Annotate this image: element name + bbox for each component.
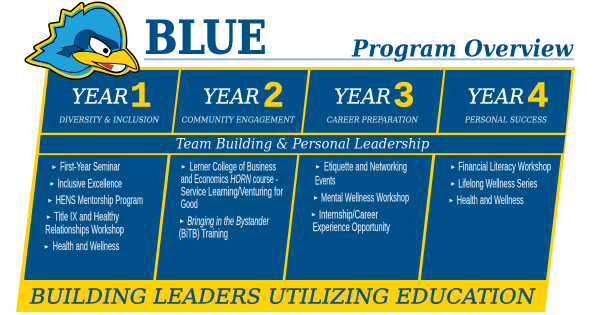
item: lifelong wellness: Lifelong Wellness Series xyxy=(458,178,537,190)
item: financial literacy: Financial Literacy Workshop xyxy=(458,162,551,174)
cheek feathers xyxy=(57,45,84,57)
item: lifelong wellness xyxy=(451,178,537,190)
beak xyxy=(72,50,137,73)
panel: year 4 activities xyxy=(421,155,561,280)
band heading: Team Building & Personal Leadership xyxy=(176,136,429,152)
item: health and wellness: Health and Wellness xyxy=(53,241,119,253)
item: title ix xyxy=(45,212,124,236)
face patch xyxy=(74,30,99,51)
brow xyxy=(85,31,119,50)
theme: community: COMMUNITY ENGAGEMENT xyxy=(182,115,296,125)
title: BLUE: BLUE xyxy=(144,10,266,64)
item: horn course: and Economics HORN course - xyxy=(181,174,278,186)
icon: blue hen mascot xyxy=(27,4,137,77)
heading: year 3: YEAR xyxy=(334,84,391,108)
theme: personal: PERSONAL SUCCESS xyxy=(464,115,547,125)
number: 1: 1 xyxy=(130,77,152,118)
heading: year 1: YEAR xyxy=(72,84,128,108)
item: title ix: Title IX and Healthy xyxy=(54,212,119,224)
item: mental wellness xyxy=(314,193,409,205)
panel: year 3 activities xyxy=(285,155,432,280)
item: etiquette xyxy=(315,161,407,187)
panel: year 3 xyxy=(303,70,444,133)
item: etiquette: Etiquette and Networking xyxy=(324,161,407,173)
item: horn course: Good xyxy=(181,199,198,211)
item: internship: Experience Opportunity xyxy=(313,222,390,234)
item: title ix: Relationships Workshop xyxy=(45,224,124,236)
panel: yellow frame xyxy=(16,67,575,312)
panel: year 2 xyxy=(174,70,308,133)
item: horn course: Service Learning/Venturing for xyxy=(181,187,283,199)
mouth xyxy=(91,61,126,72)
subtitle: Program Overview: Program Overview xyxy=(351,35,574,63)
item: inclusive excellence: Inclusive Excellence xyxy=(58,178,122,190)
panel: year 1 xyxy=(42,70,179,133)
pupil xyxy=(103,48,108,53)
tagline: BUILDING LEADERS UTILIZING EDUCATION xyxy=(29,284,536,308)
number: 3: 3 xyxy=(393,77,415,118)
item: first-year seminar: First-Year Seminar xyxy=(60,162,120,174)
panel: year 2 activities xyxy=(156,155,297,280)
panel: team building band xyxy=(39,135,565,153)
item: hens mentorship xyxy=(48,195,143,207)
theme: career: CAREER PREPARATION xyxy=(327,115,418,125)
item: mental wellness: Mental Wellness Workshop xyxy=(321,193,409,205)
item: horn course xyxy=(181,162,283,211)
tongue xyxy=(99,63,114,70)
item: bystander: Bringing in the Bystander xyxy=(187,216,270,228)
heading: year 4: YEAR xyxy=(468,84,524,108)
item: bystander xyxy=(179,216,270,241)
panel: year 1 activities xyxy=(24,155,168,280)
item: inclusive excellence xyxy=(50,178,122,190)
item: hens mentorship: HENS Mentorship Program xyxy=(56,195,143,207)
item: health and wellness xyxy=(45,241,119,253)
number: 2: 2 xyxy=(262,77,284,118)
item: horn course: Lerner College of Business xyxy=(190,162,276,174)
item: financial literacy xyxy=(451,162,551,174)
item: first-year seminar xyxy=(52,162,120,174)
item: health and wellness xyxy=(450,195,524,207)
item: internship: Internship/Career xyxy=(319,209,378,221)
panel: year 4 xyxy=(438,70,572,133)
item: bystander: (BiTB) Training xyxy=(179,229,228,241)
item: etiquette: Events xyxy=(315,175,335,187)
item: internship xyxy=(312,209,390,234)
heading: year 2: YEAR xyxy=(203,84,259,108)
item: health and wellness: Health and Wellness xyxy=(457,195,524,207)
eye xyxy=(89,37,111,57)
theme: diversity: DIVERSITY & INCLUSION xyxy=(58,115,159,125)
title rule xyxy=(144,58,574,60)
number: 4: 4 xyxy=(527,77,549,118)
